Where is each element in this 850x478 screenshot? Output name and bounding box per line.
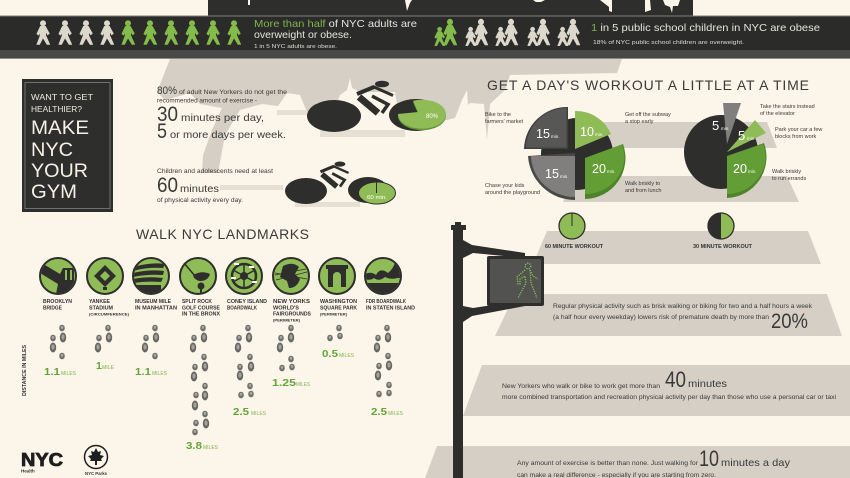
adult exercise text: or more days per week. [170, 129, 286, 141]
landmark names: BRIDGE [43, 306, 62, 312]
pie chart labels: Take the stairs instead [760, 104, 815, 110]
children exercise text: minutes [180, 183, 219, 195]
children exercise text [157, 168, 273, 204]
icon: Guggenheim [133, 258, 169, 294]
horizontal grey bands [425, 122, 850, 478]
footprints: FDR Boardwalk 2.5 miles [371, 325, 403, 418]
landmark names: WASHINGTON [320, 299, 357, 305]
landmark names: NEW YORKS [273, 299, 311, 305]
footprints: Yankee Stadium 1 mile: MILE [102, 365, 114, 371]
footprints: Coney Island 2.5 miles [233, 325, 266, 418]
footprints: Yankee Stadium 1 mile: 1 [96, 360, 102, 372]
pie chart: 60 minute: 10 [580, 124, 594, 139]
landmark names: (PERIMETER) [273, 318, 301, 322]
pie chart labels [485, 104, 822, 196]
pie chart labels: to run errands [772, 176, 806, 182]
legend: 60 minute workout [545, 213, 603, 250]
pie chart labels: Walk briskly to [625, 181, 660, 187]
landmark names: FDR BOARDWALK [366, 299, 406, 305]
icon: Coney Island wheel [226, 258, 262, 294]
landmark names: CONEY ISLAND [227, 299, 267, 305]
children pictogram row [435, 19, 580, 46]
landmark names: STADIUM [89, 306, 113, 312]
adult exercise text: 5 [157, 120, 167, 143]
skyline silhouette [157, 59, 622, 173]
pie chart labels: Chase your kids [485, 183, 525, 189]
pie chart: 30 minute: min. [748, 169, 757, 174]
pie chart labels: Park your car a few [775, 127, 822, 133]
landmark names: SPLIT ROCK [182, 299, 212, 305]
icon: Washington Square arch [319, 258, 355, 294]
footprints: Washington Square 0.5 miles: 0.5 [322, 348, 338, 360]
landmark names: SQUARE PARK [320, 306, 357, 312]
adult exercise text: minutes per day, [181, 112, 264, 124]
callout: 40 minutes: 40 [665, 367, 686, 392]
landmark names [43, 299, 415, 322]
pie chart: 60 minute: 15 [536, 126, 550, 141]
icon: pedestrian signal [451, 222, 544, 478]
logo: NYC Health: NYC [21, 450, 63, 470]
panel: make NYC your gym: WANT TO GET [31, 92, 93, 102]
footprints: Fairgrounds 1.25 miles: 1.25 [272, 377, 296, 389]
children exercise text: 60 [157, 174, 178, 197]
landmark names: (PERIMETER) [320, 312, 348, 316]
footprints: Coney Island 2.5 miles: 2.5 [233, 406, 249, 418]
footprints: Washington Square 0.5 miles: MILES [339, 353, 354, 359]
logo: NYC Health: Health [21, 468, 35, 474]
children statistic text: 1 in 5 public school children in NYC are obese [591, 22, 820, 34]
icon: Fairgrounds globe [273, 258, 309, 294]
legend: 60 minute workout: 60 MINUTE WORKOUT [545, 244, 603, 250]
adult exercise text: of adult New Yorkers do not get the [179, 90, 288, 96]
header skyline box [208, 0, 693, 16]
pie chart labels: Get off the subway [625, 112, 671, 118]
pie chart labels: blocks from work [775, 134, 817, 140]
callout: 40 minutes: more combined transportation and recreation physical activity per day than those who use a personal car or taxi [502, 394, 836, 401]
pie chart labels: Bike to the [485, 112, 511, 118]
adult exercise text: 80% [157, 85, 177, 97]
pie chart: 60 minute: 15 [545, 166, 559, 181]
legend: 30 minute workout: 30 MINUTE WORKOUT [693, 244, 752, 250]
footprints: Coney Island 2.5 miles: MILES [251, 411, 266, 417]
children exercise text: of physical activity every day. [157, 197, 243, 204]
footprints: Museum Mile 1.1 miles: MILES [152, 371, 167, 377]
heading: workout: GET A DAY'S WORKOUT A LITTLE AT A TIME [487, 77, 809, 93]
footprints: Fairgrounds 1.25 miles: MILES [296, 382, 310, 388]
pie chart: 30 minute: 20 [733, 161, 747, 176]
pie chart: 60 minute: 20 [592, 161, 606, 176]
pie chart labels: Walk briskly [772, 169, 801, 175]
callout: 20 percent: Regular physical activity such as brisk walking or biking for two and a half hours a week [553, 303, 813, 310]
children exercise text: Children and adolescents need at least [157, 168, 273, 175]
landmark names: (CIRCUMFERENCE) [89, 312, 130, 316]
landmark names: IN MANHATTAN [135, 306, 177, 312]
children statistic text [591, 22, 820, 46]
callout: 40 minutes: minutes [688, 378, 727, 390]
pie chart: 60 minute: min. [551, 134, 560, 139]
children statistic text: 18% of NYC public school children are overweight. [593, 40, 745, 46]
footprints: Washington Square 0.5 miles [322, 325, 354, 360]
adult statistic text: More than half of NYC adults are [254, 18, 417, 30]
adult statistic text: overweight or obese. [254, 29, 352, 41]
footprints: Split Rock 3.8 miles [186, 325, 218, 452]
landmark names: BOARDWALK [227, 306, 257, 312]
icon: cyclist 80 percent [277, 81, 446, 137]
pie chart: 30 minute: 5 [712, 118, 719, 133]
adult exercise text: recommended amount of exercise - [157, 98, 257, 104]
landmark names: MUSEUM MILE [135, 299, 172, 305]
panel: make NYC your gym [22, 79, 113, 212]
panel: make NYC your gym: NYC [31, 140, 73, 161]
footprints: Split Rock 3.8 miles: 3.8 [186, 440, 202, 452]
footprints: Museum Mile 1.1 miles: 1.1 [135, 366, 151, 378]
pie chart labels: and from lunch [625, 188, 661, 194]
landmark names: IN THE BRONX [182, 312, 221, 318]
callout: 20 percent [553, 303, 813, 333]
pie chart labels: farmers' market [485, 119, 523, 125]
landmark names: YANKEE [89, 299, 111, 305]
icon: Brooklyn Bridge [40, 258, 76, 294]
footprints: Brooklyn Bridge 1.1 miles [44, 325, 76, 378]
pie chart labels: of the elevator [760, 111, 795, 117]
footprints: FDR Boardwalk 2.5 miles: MILES [388, 411, 403, 417]
footprints: Museum Mile 1.1 miles [135, 325, 167, 378]
adult exercise text [157, 85, 288, 143]
logo: NYC Parks [84, 446, 108, 476]
pie chart: 30 minute: min. [721, 126, 730, 131]
pie chart labels: a stop early [625, 119, 654, 125]
landmark names: FAIRGROUNDS [273, 312, 312, 318]
callout: 10 minutes: Any amount of exercise is better than none. Just walking for [517, 460, 698, 467]
pie chart: 30 minute: 5 [738, 128, 745, 143]
icon: cyclist 80 percent: 80% [426, 114, 439, 120]
pie chart: 60 minute: min. [607, 169, 616, 174]
landmark names: GOLF COURSE [182, 306, 221, 312]
pie chart: 60 minute [524, 107, 625, 200]
footprints: Yankee Stadium 1 mile [95, 325, 114, 372]
callout: 20 percent: 20% [771, 310, 808, 333]
panel: make NYC your gym: YOUR [31, 161, 88, 182]
footprints: Fairgrounds 1.25 miles [272, 325, 310, 389]
logo: NYC Parks: NYC Parks [85, 471, 107, 476]
callout: 10 minutes [517, 446, 791, 478]
landmark names: IN STATEN ISLAND [366, 306, 415, 312]
legend: 30 minute workout [693, 213, 752, 250]
footprints: Split Rock 3.8 miles: MILES [203, 445, 218, 451]
callout: 10 minutes: minutes a day [721, 457, 791, 469]
callout: 10 minutes: 10 [699, 446, 719, 471]
adult exercise text: 30 [157, 103, 178, 126]
adult statistic text [254, 18, 417, 50]
heading: landmarks: WALK NYC LANDMARKS [136, 226, 309, 242]
icon: Yankee Stadium [87, 258, 123, 294]
callout: 40 minutes [502, 367, 836, 401]
footprints: FDR Boardwalk 2.5 miles: 2.5 [371, 406, 387, 418]
icon: FDR boardwalk wave [365, 258, 401, 294]
icon: cyclist 60 minutes [220, 161, 396, 207]
landmark names: BROOKLYN [43, 299, 72, 305]
footprints: Brooklyn Bridge 1.1 miles: 1.1 [44, 366, 60, 378]
pie chart: 30 minute [684, 103, 766, 198]
pie chart: 60 minute: min. [595, 132, 604, 137]
panel: make NYC your gym: GYM [31, 182, 77, 203]
callout: 40 minutes: New Yorkers who walk or bike to work get more than [502, 383, 661, 390]
pie chart: 60 minute: min. [560, 174, 569, 179]
icon: golf [180, 258, 216, 294]
pie chart: 30 minute: min. [747, 136, 756, 141]
landmark names: WORLD'S [273, 306, 300, 312]
pie chart labels: around the playground [485, 190, 540, 196]
adult pictogram row [37, 21, 241, 44]
statistics band [0, 16, 850, 59]
footprints: Brooklyn Bridge 1.1 miles: MILES [61, 371, 76, 377]
panel: make NYC your gym: HEALTHIER? [31, 104, 82, 114]
panel: make NYC your gym: MAKE [31, 118, 89, 139]
adult statistic text: 1 in 5 NYC adults are obese. [254, 44, 338, 50]
callout: 20 percent: (a half hour every weekday) lowers risk of premature death by more than [553, 314, 770, 321]
axis label: distance in miles: DISTANCE IN MILES [22, 344, 28, 396]
icon: cyclist 60 minutes: 60 min. [367, 195, 388, 201]
